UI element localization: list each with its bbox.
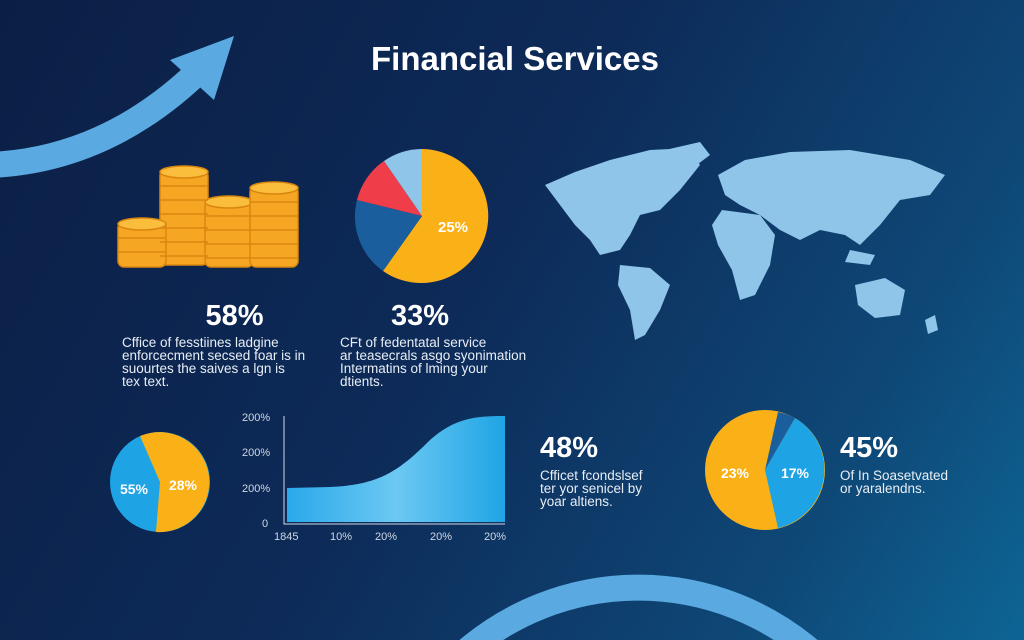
pie chart bottom right: 17% [781,465,810,481]
pie chart bottom left: 55% [120,481,149,497]
pie chart top [355,149,488,283]
stat 48%: Cfficet fcondslsef [540,468,643,483]
pie chart bottom right: 23% [721,465,750,481]
stat 33%: ar teasecrals asgo syonimation [340,348,526,363]
area chart: 0 [262,518,268,530]
stat 45%: Of In Soasetvated [840,468,948,483]
stat 33%: CFt of fedentatal service [340,335,486,350]
icon: coin stacks [118,166,298,267]
area chart: 200% [242,483,270,495]
stat 58%: Cffice of fesstiines ladgine [122,335,279,350]
stat 45% [840,432,948,496]
stat 48%: 48% [540,432,598,464]
stat 33%: dtients. [340,374,384,389]
area chart: 200% [242,447,270,459]
world map [545,142,945,340]
stat 48%: yoar altiens. [540,494,613,509]
stat 58% [122,300,305,389]
arrow: growth [0,36,234,165]
area chart: 200% [242,412,270,424]
area chart: 20% [430,531,452,543]
stat 48% [540,432,643,509]
area chart: 20% [484,531,506,543]
stat 33%: 33% [391,300,449,332]
pie chart top: 25% [438,219,468,236]
stat 58%: tex text. [122,374,169,389]
stat 58%: enforcecment secsed foar is in [122,348,305,363]
stat 33%: Intermatins of lming your [340,361,488,376]
pie chart bottom left [110,432,210,532]
title: Financial Services [371,40,659,77]
stat 58%: 58% [205,300,264,332]
stat 33% [340,300,526,389]
stat 45%: or yaralendns. [840,481,926,496]
area chart: 1845 [274,531,298,543]
area chart [242,412,506,543]
pie chart bottom right [705,410,825,530]
bottom arc [462,588,815,640]
stat 48%: ter yor senicel by [540,481,642,496]
area chart: 20% [375,531,397,543]
pie chart bottom left: 28% [169,477,198,493]
stat 58%: suourtes the saives a lgn is [122,361,285,376]
area chart: 10% [330,531,352,543]
stat 45%: 45% [840,432,898,464]
